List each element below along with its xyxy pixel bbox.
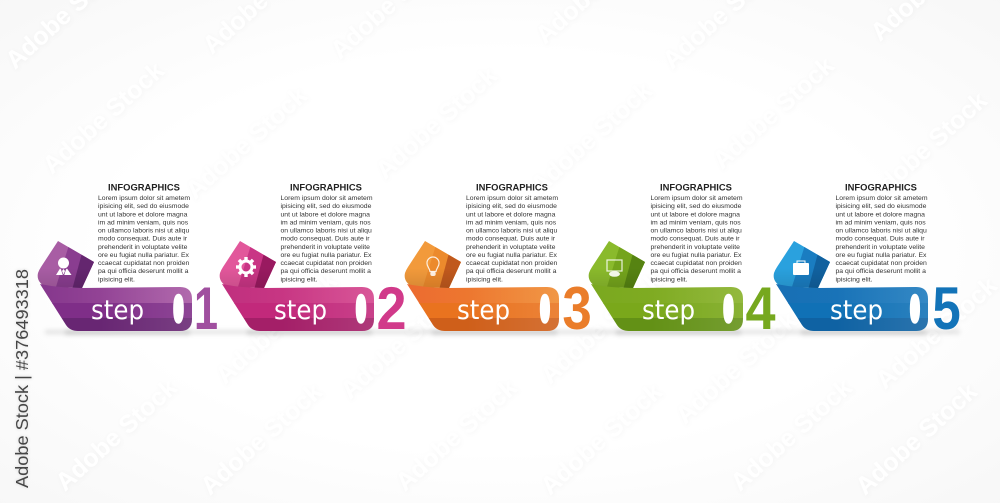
ground shadow <box>45 330 960 335</box>
step 1 number zero: 0 <box>174 292 183 328</box>
step 4 number digit: 4 <box>745 275 776 343</box>
watermark pattern: Adobe Stock <box>210 266 343 389</box>
step 1 text block: prehenderit in voluptate velite <box>98 244 188 251</box>
step 5 ribbon <box>772 284 932 332</box>
watermark pattern: Adobe Stock <box>535 266 668 389</box>
step 1 text block: ccaecat cupidatat non proiden <box>98 260 190 267</box>
step 5 text block: ipisicing elit, sed do eiusmode <box>836 203 927 210</box>
step 1 text block: on ullamco laboris nisi ut aliqu <box>98 228 189 234</box>
step 5 heading: INFOGRAPHICS <box>845 182 917 192</box>
watermark pattern: Adobe Stock <box>180 81 313 204</box>
step 3 text block: im ad minim veniam, quis nos <box>466 219 557 226</box>
step 3 text block: Lorem ipsum dolor sit ametem <box>466 195 558 202</box>
step 2 text block: Lorem ipsum dolor sit ametem <box>280 195 373 202</box>
step 2 ribbon and flag <box>220 241 374 331</box>
step 5 text block: ccaecat cupidatat non proiden <box>836 260 927 267</box>
step 5 number zero: 0 <box>911 292 919 328</box>
step 4 text block: ore eu fugiat nulla pariatur. Ex <box>650 252 742 259</box>
step 3 number zero: 0 <box>541 292 549 328</box>
step 4 text block: on ullamco laboris nisi ut aliqu <box>650 228 742 234</box>
step 4 label: step <box>642 295 695 326</box>
step 1 label: step <box>91 295 144 326</box>
icon: person <box>56 258 72 275</box>
watermark pattern: Adobe Stock <box>850 377 983 500</box>
step 4 text block: ipisicing elit. <box>650 276 687 283</box>
step 1 text block: im ad minim veniam, quis nos <box>98 219 189 226</box>
step 4 text block: im ad minim veniam, quis nos <box>650 219 741 226</box>
step 2 text block: ipisicing elit, sed do eiusmode <box>280 203 372 210</box>
step 4 ribbon and flag <box>588 241 743 331</box>
watermark pattern: Adobe Stock <box>50 373 183 496</box>
step 3 ribbon and flag <box>404 241 559 331</box>
watermark pattern: Adobe Stock <box>525 76 658 199</box>
step 5 text block: Lorem ipsum dolor sit ametem <box>836 195 928 202</box>
step 5 <box>774 184 960 331</box>
icon: briefcase <box>793 261 809 275</box>
step 4 text block: prehenderit in voluptate velite <box>650 244 740 251</box>
step 3 label: step <box>457 295 510 326</box>
step 4 number zero: 0 <box>724 292 733 328</box>
step 1 text block: unt ut labore et dolore magna <box>98 211 188 218</box>
step 3 text block: pa qui officia deserunt mollit a <box>466 268 557 275</box>
step 1 <box>38 184 217 331</box>
step 2 text block: unt ut labore et dolore magna <box>280 211 370 218</box>
step 1 text block: modo consequat. Duis aute ir <box>98 236 188 243</box>
step 4 heading: INFOGRAPHICS <box>660 182 732 192</box>
step 3 number digit: 3 <box>562 275 592 342</box>
watermark pattern: Adobe Stock <box>535 377 668 500</box>
step 4 text block: pa qui officia deserunt mollit a <box>650 268 741 275</box>
vertical stock id text: Adobe Stock | #376493318 <box>12 269 32 488</box>
step 2 flag <box>220 241 276 288</box>
step 3 text block: ccaecat cupidatat non proiden <box>466 260 558 267</box>
step 2 text block: modo consequat. Duis aute ir <box>280 236 370 243</box>
step 3 text block: ipisicing elit, sed do eiusmode <box>466 203 557 210</box>
step 5 text block: im ad minim veniam, quis nos <box>836 219 926 226</box>
step 4 text block: modo consequat. Duis aute ir <box>650 236 740 243</box>
step 2 label: step <box>274 295 327 326</box>
icon: monitor <box>607 260 622 277</box>
step 4 text block: ipisicing elit, sed do eiusmode <box>650 203 742 210</box>
step 5 label: step <box>830 295 883 326</box>
step 5 text block: ore eu fugiat nulla pariatur. Ex <box>836 252 927 259</box>
watermark pattern: Adobe Stock <box>725 373 858 496</box>
watermark pattern: Adobe Stock <box>195 377 328 500</box>
step 5 text block: pa qui officia deserunt mollit a <box>836 268 926 275</box>
step 3 <box>404 184 590 331</box>
step 3 flag <box>404 241 461 288</box>
step 1 text block: ipisicing elit. <box>98 276 135 283</box>
step 2 text block: im ad minim veniam, quis nos <box>280 219 371 226</box>
watermark pattern: Adobe Stock <box>370 61 503 184</box>
step 3 text block: unt ut labore et dolore magna <box>466 211 556 218</box>
step 4 text block: ccaecat cupidatat non proiden <box>650 260 742 267</box>
step 2 ribbon <box>218 284 378 332</box>
watermark pattern: Adobe Stock <box>670 306 803 429</box>
step 1 flag <box>38 241 94 288</box>
step 5 text block: on ullamco laboris nisi ut aliqu <box>836 228 927 234</box>
step 2 text block: on ullamco laboris nisi ut aliqu <box>280 228 372 234</box>
watermark pattern: Adobe Stock <box>707 51 840 174</box>
step 1 number digit: 1 <box>194 276 218 343</box>
step 1 text block: Lorem ipsum dolor sit ametem <box>98 195 190 202</box>
step 3 text block: modo consequat. Duis aute ir <box>466 236 556 243</box>
step 1 ribbon <box>36 284 196 332</box>
step 4 ribbon <box>587 284 747 332</box>
step 2 text block: ccaecat cupidatat non proiden <box>280 260 372 267</box>
step 2 text block: ipisicing elit. <box>280 276 317 283</box>
step 1 text block: ore eu fugiat nulla pariatur. Ex <box>98 252 190 259</box>
step 2 heading: INFOGRAPHICS <box>290 182 362 192</box>
step 2 text block: prehenderit in voluptate velite <box>280 244 370 251</box>
step 2 text block: pa qui officia deserunt mollit a <box>280 268 371 275</box>
step 4 <box>588 184 776 331</box>
step 2 number zero: 0 <box>357 292 365 328</box>
step 5 flag <box>774 241 830 288</box>
step 3 text block: ore eu fugiat nulla pariatur. Ex <box>466 252 558 259</box>
step 5 text block: ipisicing elit. <box>836 276 872 283</box>
step 3 text block: prehenderit in voluptate velite <box>466 244 556 251</box>
step 2 number digit: 2 <box>376 275 407 343</box>
step 5 text block: prehenderit in voluptate velite <box>836 244 925 251</box>
icon: gear <box>236 257 256 277</box>
icon: light bulb <box>427 257 439 276</box>
step 2 <box>220 184 404 331</box>
watermark pattern: Adobe Stock <box>390 373 523 496</box>
step 3 text block: on ullamco laboris nisi ut aliqu <box>466 228 557 234</box>
step 5 text block: modo consequat. Duis aute ir <box>836 236 925 243</box>
step 4 text block: Lorem ipsum dolor sit ametem <box>650 195 743 202</box>
step 5 ribbon and flag <box>774 241 928 331</box>
watermark pattern: Adobe Stock <box>37 56 170 179</box>
step 5 number digit: 5 <box>932 275 961 342</box>
step 3 text block: ipisicing elit. <box>466 276 503 283</box>
step 4 flag <box>588 241 645 288</box>
watermark pattern: Adobe Stock <box>335 281 468 404</box>
step 3 heading: INFOGRAPHICS <box>476 182 548 192</box>
step 2 text block: ore eu fugiat nulla pariatur. Ex <box>280 252 372 259</box>
step 1 heading: INFOGRAPHICS <box>108 182 180 192</box>
watermark pattern: Adobe Stock <box>860 86 993 209</box>
step 1 text block: pa qui officia deserunt mollit a <box>98 268 189 275</box>
step 5 text block: unt ut labore et dolore magna <box>836 211 925 218</box>
step 1 text block: ipisicing elit, sed do eiusmode <box>98 203 189 210</box>
step 3 ribbon <box>403 284 563 332</box>
step 4 text block: unt ut labore et dolore magna <box>650 211 740 218</box>
watermark pattern: Adobe Stock <box>870 271 1000 394</box>
